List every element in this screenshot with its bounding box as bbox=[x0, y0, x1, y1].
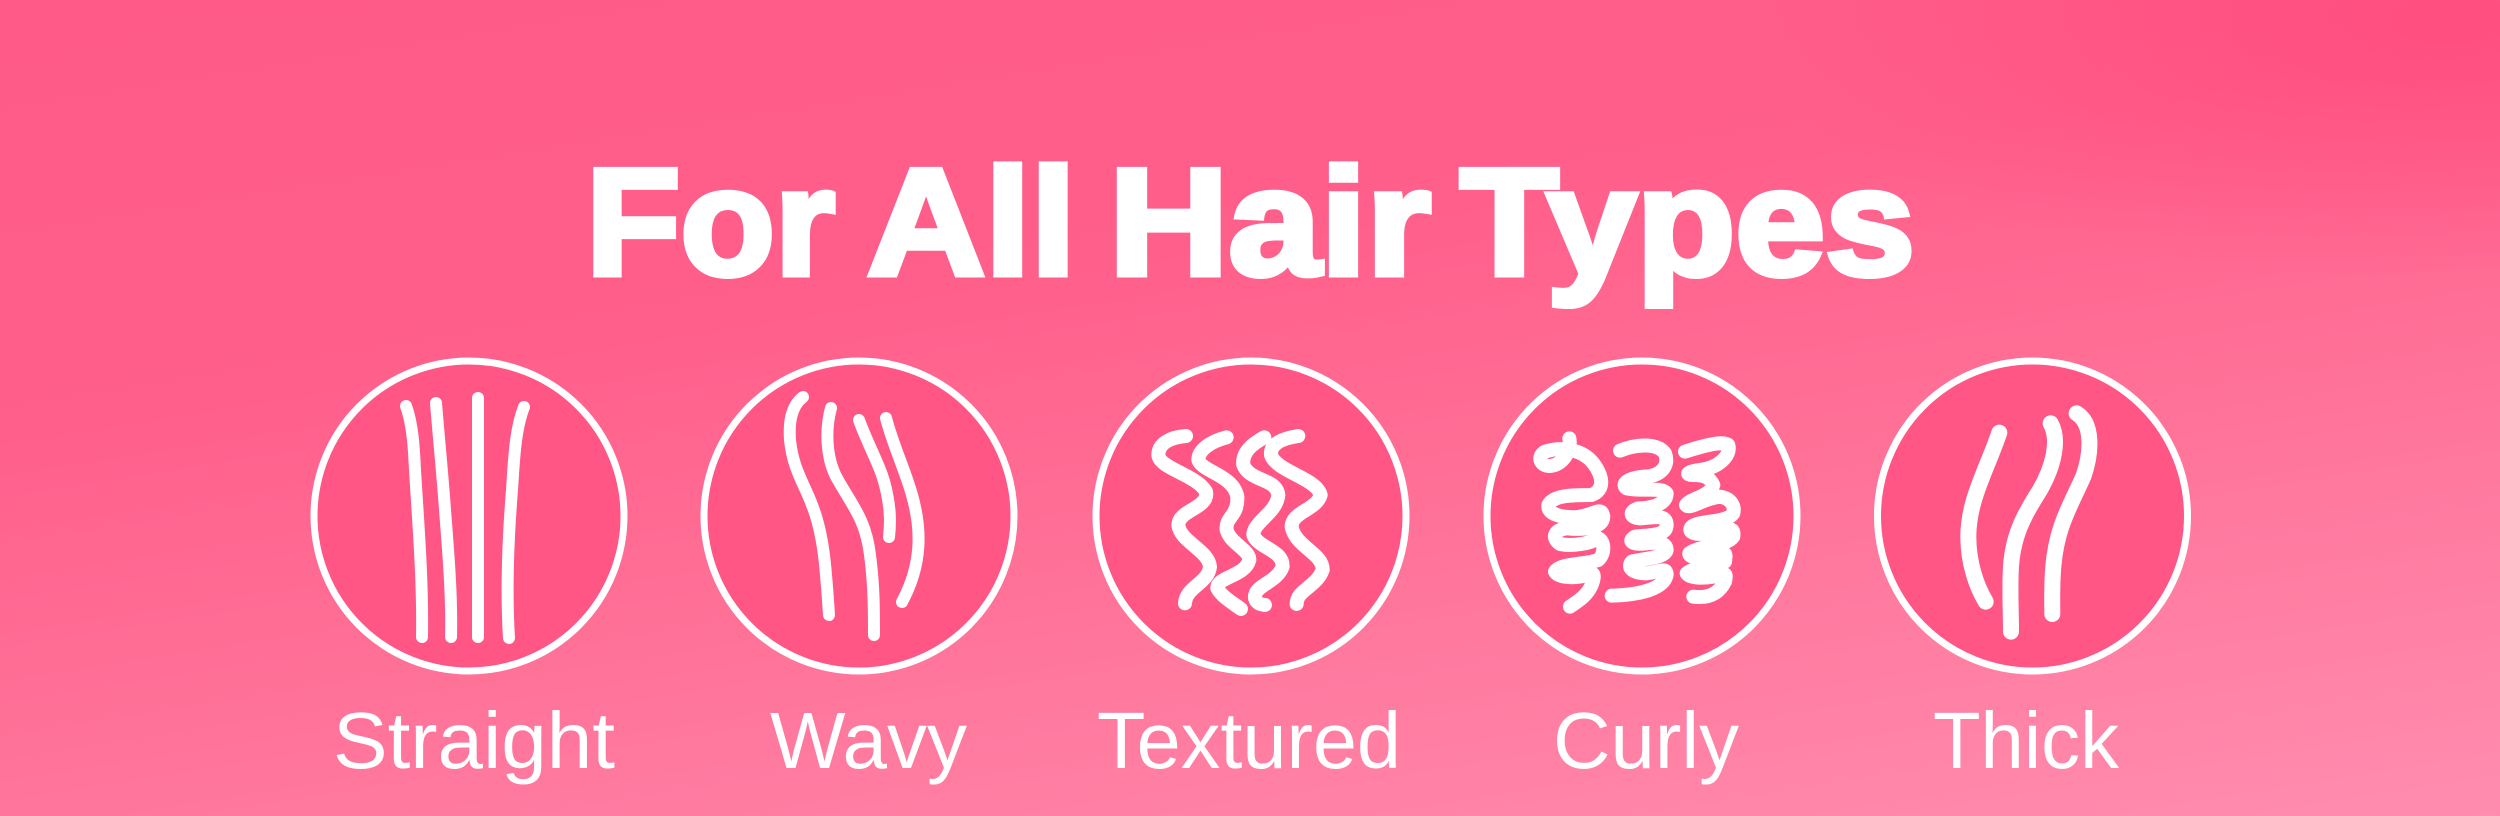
label: curly: Curly bbox=[1553, 696, 1739, 785]
title: Hair bbox=[1109, 138, 1431, 308]
circle: curly bbox=[1487, 361, 1797, 671]
panel: textured bbox=[1096, 361, 1406, 785]
label: textured: Textured bbox=[1097, 696, 1401, 785]
panel: curly bbox=[1487, 361, 1797, 785]
label: wavy: Wavy bbox=[770, 696, 967, 785]
icon: textured hair bbox=[1158, 436, 1323, 609]
icon: curly hair bbox=[1540, 438, 1734, 607]
panel: straight bbox=[314, 361, 624, 785]
panel: thick bbox=[1878, 361, 2188, 785]
title: For bbox=[586, 138, 835, 308]
icon: thick hair bbox=[1968, 413, 2089, 632]
circle: wavy bbox=[704, 361, 1014, 671]
label: straight: Straight bbox=[333, 696, 615, 785]
circle: thick bbox=[1878, 361, 2188, 671]
title: Types bbox=[1460, 138, 1915, 308]
title: All bbox=[867, 138, 1076, 308]
circle: textured bbox=[1096, 361, 1406, 671]
icon: straight hair bbox=[406, 398, 524, 638]
title bbox=[586, 138, 1915, 308]
icon: wavy hair bbox=[790, 397, 919, 635]
panel: wavy bbox=[704, 361, 1014, 785]
circle: straight bbox=[314, 361, 624, 671]
label: thick: Thick bbox=[1933, 696, 2120, 785]
